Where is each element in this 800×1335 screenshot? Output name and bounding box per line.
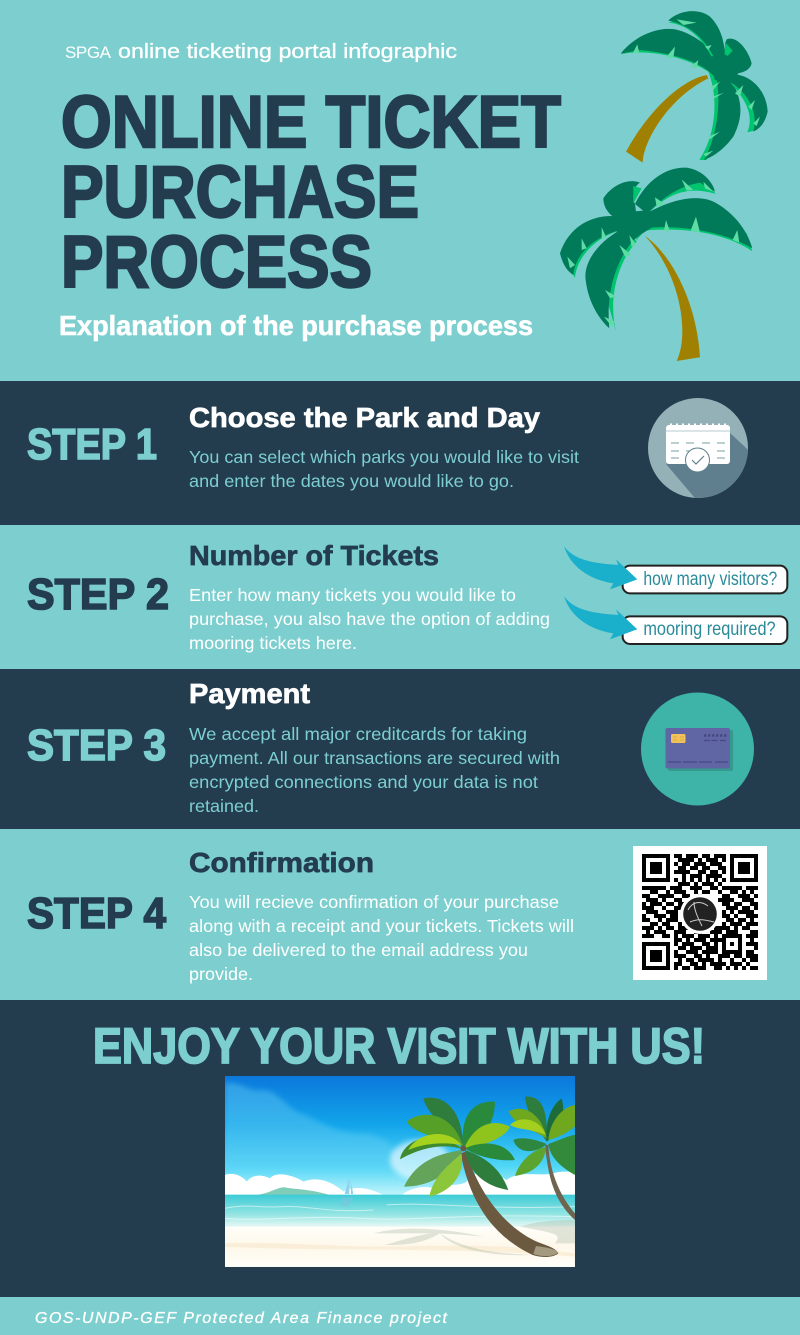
callout: mooring required <box>564 596 787 644</box>
subtitle: Explanation of the purchase process <box>59 310 533 341</box>
header kicker text: SPGA <box>65 43 112 62</box>
panel: footer <box>0 1297 800 1335</box>
callout: how many visitors <box>564 546 787 593</box>
panel: closing <box>0 1000 800 1297</box>
icon: credit card <box>641 692 754 806</box>
step 3 description: retained. <box>189 796 259 816</box>
step 1 heading: Choose the Park and Day <box>189 402 540 433</box>
step 2 description: mooring tickets here. <box>189 633 357 653</box>
step 1 label: STEP 1 <box>27 420 157 469</box>
step 4 description: You will recieve confirmation of your purchase <box>189 892 559 912</box>
panel: step 1 <box>0 381 800 525</box>
step 3 description: payment. All our transactions are secured with <box>189 748 560 768</box>
icon: lower palm tree <box>560 168 752 361</box>
step 3 label: STEP 3 <box>27 721 166 770</box>
step 1 description: and enter the dates you would like to go. <box>189 471 514 491</box>
step 4 description: also be delivered to the email address you <box>189 940 528 960</box>
step 3 description: encrypted connections and your data is not <box>189 772 538 792</box>
footer credit: GOS-UNDP-GEF Protected Area Finance project <box>35 1310 448 1327</box>
title <box>61 82 561 303</box>
step 3 description <box>189 724 560 816</box>
panel: step 4 <box>0 829 800 1000</box>
illustration: tropical beach <box>225 1076 575 1267</box>
step 4 label: STEP 4 <box>27 889 166 938</box>
panel: step 2 <box>0 525 800 669</box>
QR code <box>633 846 767 980</box>
step 4 heading: Confirmation <box>189 847 374 878</box>
icon: calendar <box>648 398 748 498</box>
panel: step 3 <box>0 669 800 829</box>
header kicker text: online ticketing portal infographic <box>118 41 457 63</box>
closing headline: ENJOY YOUR VISIT WITH US! <box>93 1018 705 1074</box>
step 2 description: purchase, you also have the option of adding <box>189 609 550 629</box>
panel: header <box>0 0 800 381</box>
step 4 description: provide. <box>189 964 253 984</box>
step 2 label: STEP 2 <box>27 570 169 619</box>
title: ONLINE TICKET <box>61 82 561 163</box>
step 1 description: You can select which parks you would like to visit <box>189 447 579 467</box>
icon: upper palm tree <box>621 11 768 163</box>
title: PROCESS <box>61 222 372 303</box>
step 4 description <box>189 892 574 984</box>
callout: mooring required: mooring required? <box>643 619 776 640</box>
step 2 description: Enter how many tickets you would like to <box>189 585 516 605</box>
step 2 heading: Number of Tickets <box>189 540 439 571</box>
step 3 heading: Payment <box>189 678 310 709</box>
callout: how many visitors: how many visitors? <box>643 569 777 590</box>
step 1 description <box>189 447 579 491</box>
step 4 description: along with a receipt and your tickets. Tickets will <box>189 916 574 936</box>
step 3 description: We accept all major creditcards for taking <box>189 724 527 744</box>
title: PURCHASE <box>61 152 419 233</box>
step 2 description <box>189 585 550 653</box>
